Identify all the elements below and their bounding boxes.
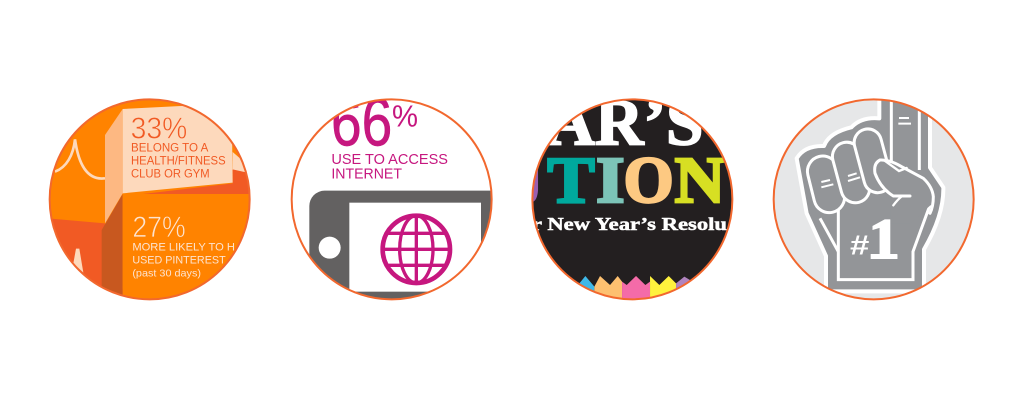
- badge: New Year's Resolutions poster: [531, 98, 734, 300]
- heading: TION in colours: T: [547, 144, 595, 217]
- heading: TION in colours: [533, 156, 724, 204]
- icon: foam finger: [797, 97, 943, 291]
- text: 27% more likely to have used Pinterest: [133, 216, 234, 278]
- badge border: [292, 99, 492, 299]
- badge border: [50, 99, 250, 299]
- text: 33% belong to a health club: 33%: [131, 112, 187, 146]
- heading: TION in colours: N: [675, 144, 725, 217]
- badge border: [774, 99, 974, 299]
- heading: TION in colours: I: [596, 144, 625, 217]
- badge: internet use on phone: [290, 98, 493, 300]
- text: 27% more likely to have used Pinterest: (past 30 days): [132, 268, 201, 279]
- text: use to access internet: USE TO ACCESS: [331, 151, 448, 168]
- text: use to access internet: INTERNET: [331, 166, 402, 183]
- text: #1: [850, 219, 898, 259]
- subtitle: r New Year’s Resolu: [532, 214, 727, 234]
- badge: fitness statistics: [48, 98, 251, 300]
- text: #1: #: [850, 230, 870, 261]
- badge border: [532, 99, 732, 299]
- text: 33% belong to a health club: [131, 112, 226, 181]
- text: 27% more likely to have used Pinterest: 27%: [132, 211, 186, 244]
- icon: globe: [382, 215, 450, 283]
- text: 66%: [334, 100, 417, 146]
- heading: TION in colours: O: [624, 144, 674, 217]
- text: 27% more likely to have used Pinterest: USED PINTEREST: [132, 254, 226, 266]
- text: 27% more likely to have used Pinterest: MORE LIKELY TO H: [132, 242, 235, 254]
- text: 66%: %: [392, 100, 418, 134]
- heading: AR'S: AR’S: [547, 86, 703, 159]
- text: 33% belong to a health club: BELONG TO A: [131, 141, 209, 155]
- text: use to access internet: [332, 154, 448, 178]
- zigzag colour strip: [580, 276, 690, 298]
- text: 33% belong to a health club: CLUB OR GYM: [131, 167, 210, 181]
- badge: number one foam finger: [772, 98, 975, 300]
- text: 66%: 66: [331, 85, 392, 161]
- text: 33% belong to a health club: HEALTH/FITNESS: [131, 154, 226, 168]
- icon: phone: [309, 190, 491, 298]
- text: #1: 1: [868, 209, 900, 271]
